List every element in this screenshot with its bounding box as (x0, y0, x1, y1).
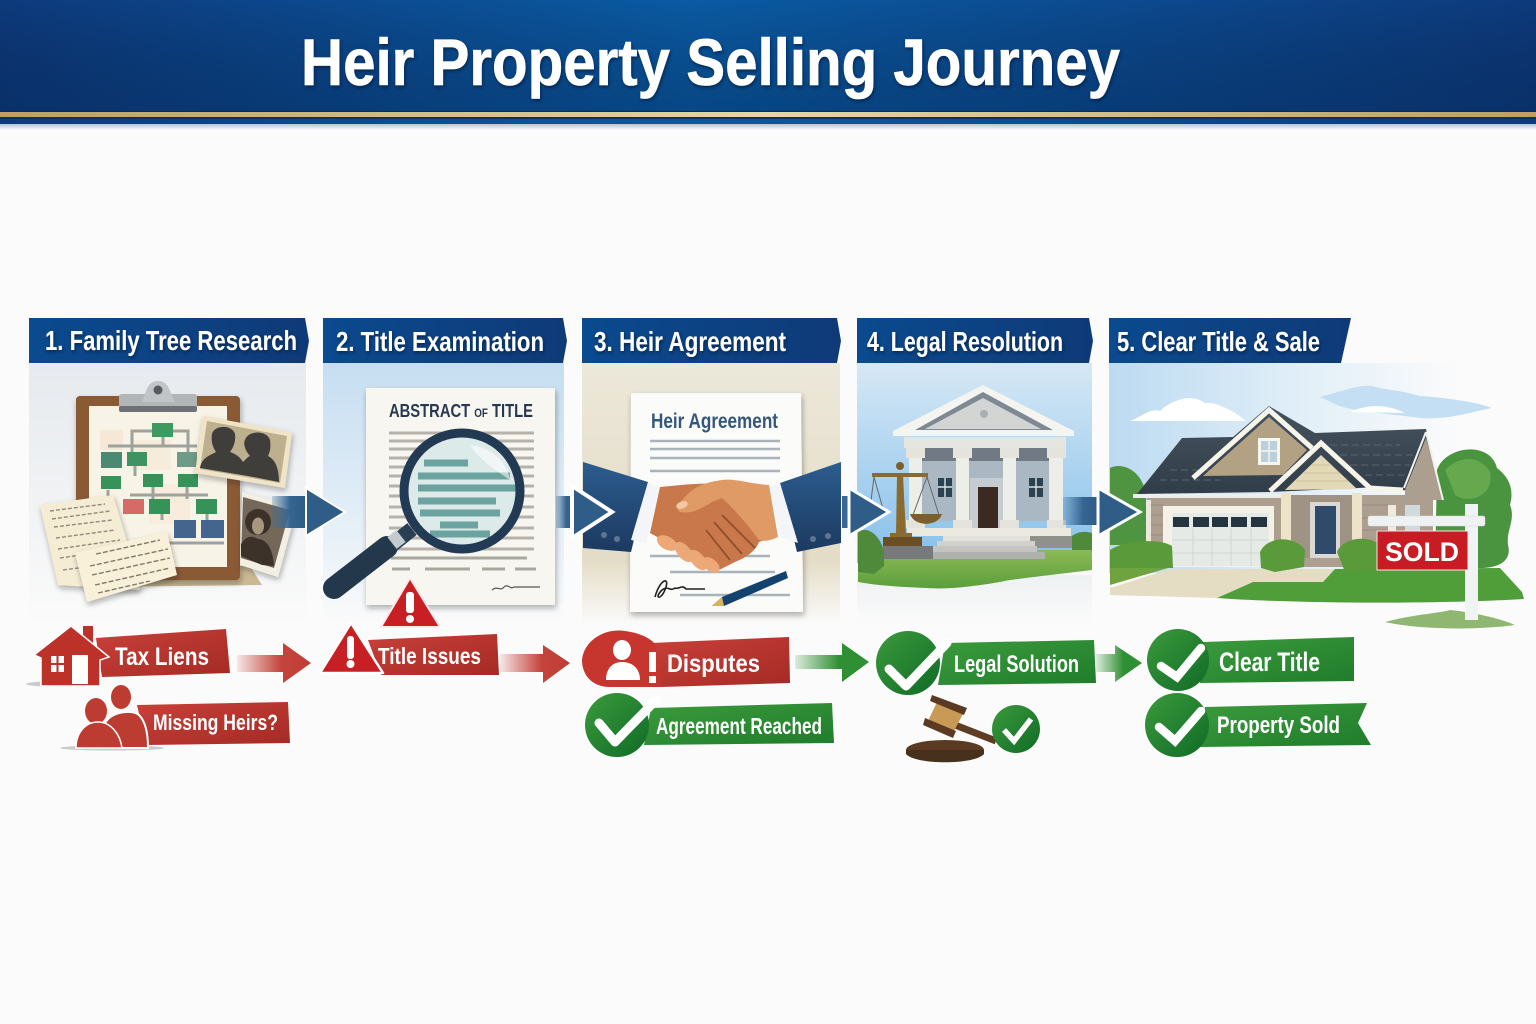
arrow: step 2 to step 3 (556, 486, 612, 538)
icon: house (1133, 406, 1443, 567)
panel: step 4 legal resolution (857, 318, 1093, 625)
arrow: green legal solution to clear title (1096, 645, 1142, 682)
callout: clear title (1147, 629, 1354, 691)
callout: missing heirs (60, 685, 290, 750)
arrow: step 3 to step 4 (842, 488, 889, 536)
callout: legal solution (876, 631, 1096, 695)
icon: check badge (1145, 693, 1209, 757)
icon: pen (712, 571, 788, 606)
panel: step 3 heir agreement (582, 318, 841, 625)
callout: agreement reached (585, 693, 834, 757)
icon: handshake (583, 462, 841, 576)
icon: sold sign (1368, 504, 1515, 628)
document: heir agreement: Heir Agreement (651, 410, 778, 433)
callout: disputes: Disputes (667, 650, 760, 678)
callout: tax liens: Tax Liens (115, 643, 209, 671)
icon: bushes (1110, 539, 1378, 572)
callout: clear title: Clear Title (1219, 647, 1320, 677)
heading: step 5 (1109, 318, 1351, 363)
icon: magnifying glass (334, 432, 521, 588)
callout: property sold (1145, 693, 1371, 757)
callout: property sold: Property Sold (1217, 712, 1340, 739)
heading: step 5: 5. Clear Title & Sale (1117, 326, 1320, 357)
callout: disputes (582, 631, 790, 687)
icon: check badge (1147, 629, 1209, 691)
document: heir agreement (630, 393, 803, 612)
icon: handwritten notes (40, 495, 177, 602)
icon: clipboard with family tree (76, 381, 262, 587)
heading: step 2 (323, 318, 567, 363)
heading: step 3: 3. Heir Agreement (594, 326, 786, 357)
heading: step 1 (29, 318, 309, 363)
arrow: step 4 to step 5 (1063, 488, 1140, 536)
panel: step 5 clear title and sale (1109, 318, 1524, 628)
icon: courthouse (883, 385, 1074, 559)
icon: check badge (585, 693, 656, 757)
icon: warning triangle (320, 623, 383, 673)
icon: person alert (582, 631, 661, 687)
title: Heir Property Selling Journey (301, 25, 1120, 99)
heading: step 3 (582, 318, 841, 363)
icon: sold sign: SOLD (1385, 537, 1459, 567)
icon: clouds (1130, 386, 1492, 421)
document: abstract of title: ABSTRACT OF TITLE (389, 401, 533, 421)
heading: step 4 (857, 318, 1093, 363)
heading: step 2: 2. Title Examination (336, 326, 544, 357)
icon: driveway and lawn (1110, 566, 1524, 603)
icon: scales of justice (869, 462, 942, 546)
callout: title issues: Title Issues (378, 643, 481, 669)
callout: legal solution: Legal Solution (954, 651, 1079, 678)
arrow: green disputes to legal solution (795, 643, 869, 682)
callout: title issues (320, 623, 499, 675)
icon: shrubs (858, 530, 1092, 574)
icon: two people (76, 685, 148, 748)
icon: couple photo (195, 416, 292, 488)
callout: missing heirs: Missing Heirs? (153, 710, 278, 735)
arrow: red tax liens to title issues (237, 643, 311, 683)
icon: check badge (876, 631, 947, 695)
callout: tax liens (26, 626, 230, 687)
grass lawn (858, 550, 1092, 588)
icon: gavel with check (906, 695, 1040, 762)
icon: portrait photo (240, 492, 297, 577)
icon: red house (26, 626, 109, 687)
panel: step 2 title examination (323, 318, 567, 627)
panel: step 1 family tree research (29, 318, 309, 625)
document: abstract of title (366, 388, 555, 605)
callout: agreement reached: Agreement Reached (656, 713, 822, 739)
heading: step 4: 4. Legal Resolution (867, 326, 1063, 357)
header banner (0, 0, 1536, 130)
heading: step 1: 1. Family Tree Research (45, 325, 297, 356)
icon: trees (1110, 449, 1512, 568)
icon: warning triangle upper (381, 578, 440, 627)
arrow: red title issues to disputes (500, 645, 570, 683)
arrow: step 1 to step 2 (272, 488, 345, 536)
